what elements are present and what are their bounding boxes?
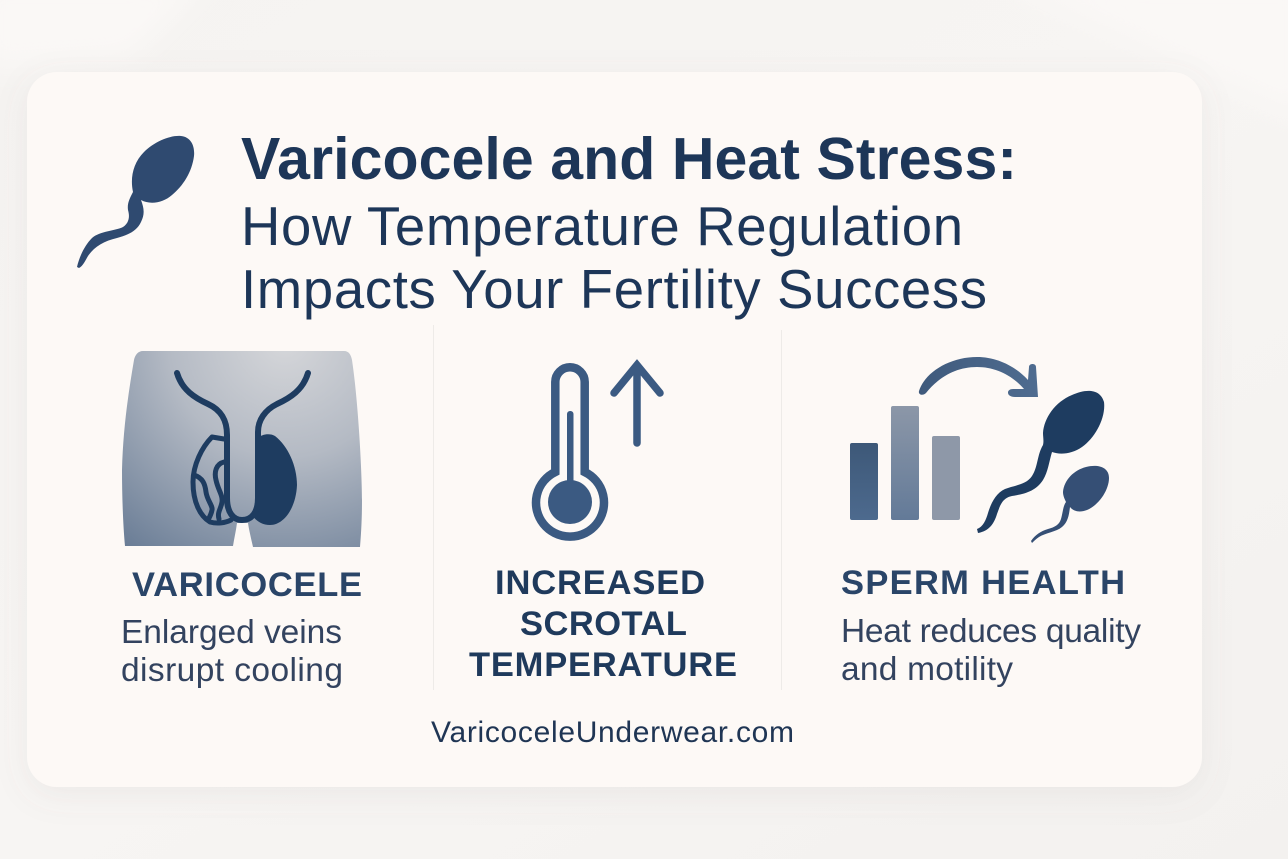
- icon: thermometer: [536, 367, 604, 537]
- heading: increased scrotal temperature: INCREASED: [495, 564, 705, 602]
- description: sperm health: [841, 613, 1141, 688]
- title: Varicocele and Heat Stress:: [241, 126, 1017, 192]
- panel: varicocele column: [121, 351, 362, 689]
- icon: large sperm: [977, 391, 1104, 533]
- description: sperm health: Heat reduces quality: [841, 613, 1141, 650]
- heading: varicocele: VARICOCELE: [132, 566, 362, 604]
- heading: increased scrotal temperature: TEMPERATURE: [469, 646, 737, 684]
- panel: main card: [27, 72, 1202, 787]
- heading: sperm health: SPERM HEALTH: [841, 564, 1125, 602]
- icon: curved arrow: [919, 357, 1038, 397]
- divider right: [781, 330, 782, 690]
- title: [241, 126, 1017, 320]
- divider left: [433, 325, 434, 690]
- website footer: VaricoceleUnderwear.com: [431, 716, 794, 749]
- panel: sperm health column: [841, 357, 1141, 688]
- heading: increased scrotal temperature: SCROTAL: [520, 605, 687, 643]
- bar chart: [850, 406, 960, 520]
- heading: increased scrotal temperature: [469, 564, 737, 684]
- description: sperm health: and motility: [841, 651, 1013, 688]
- description: varicocele: [121, 614, 343, 689]
- description: varicocele: disrupt cooling: [121, 652, 343, 689]
- icon: small sperm: [1031, 466, 1109, 543]
- icon: up arrow: [614, 365, 660, 443]
- icon: sperm beside title: [77, 136, 194, 268]
- description: varicocele: Enlarged veins: [121, 614, 342, 651]
- title: How Temperature Regulation: [241, 196, 963, 257]
- icon: pelvis with varicocele anatomy: [122, 351, 362, 547]
- panel: temperature column: [469, 365, 737, 684]
- title: Impacts Your Fertility Success: [241, 259, 987, 320]
